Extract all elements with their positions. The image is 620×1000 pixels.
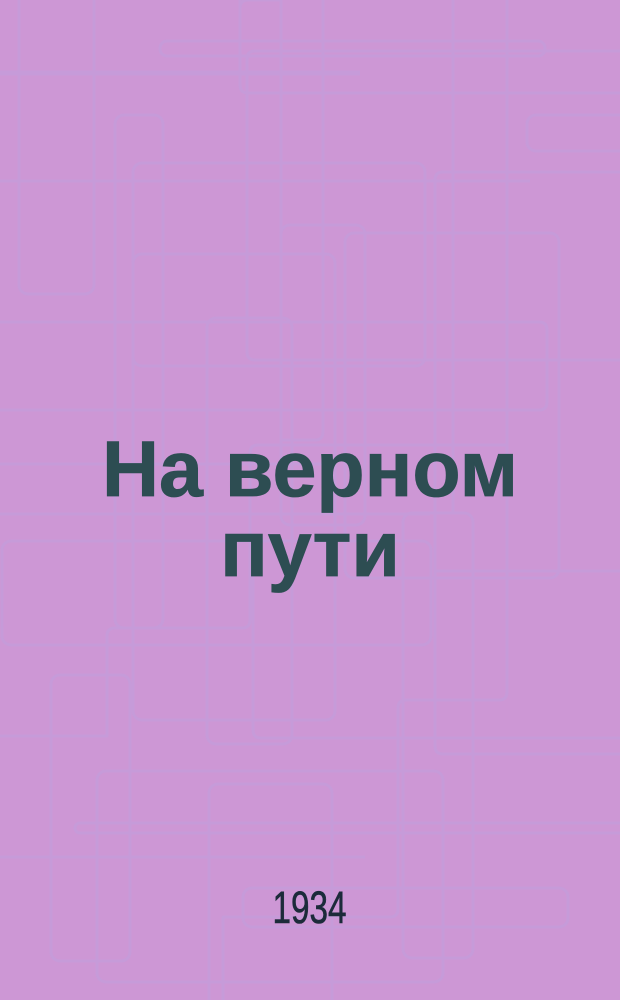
title: На верном	[102, 424, 518, 513]
year: 1934	[272, 883, 347, 933]
title second line: пути	[220, 504, 400, 593]
